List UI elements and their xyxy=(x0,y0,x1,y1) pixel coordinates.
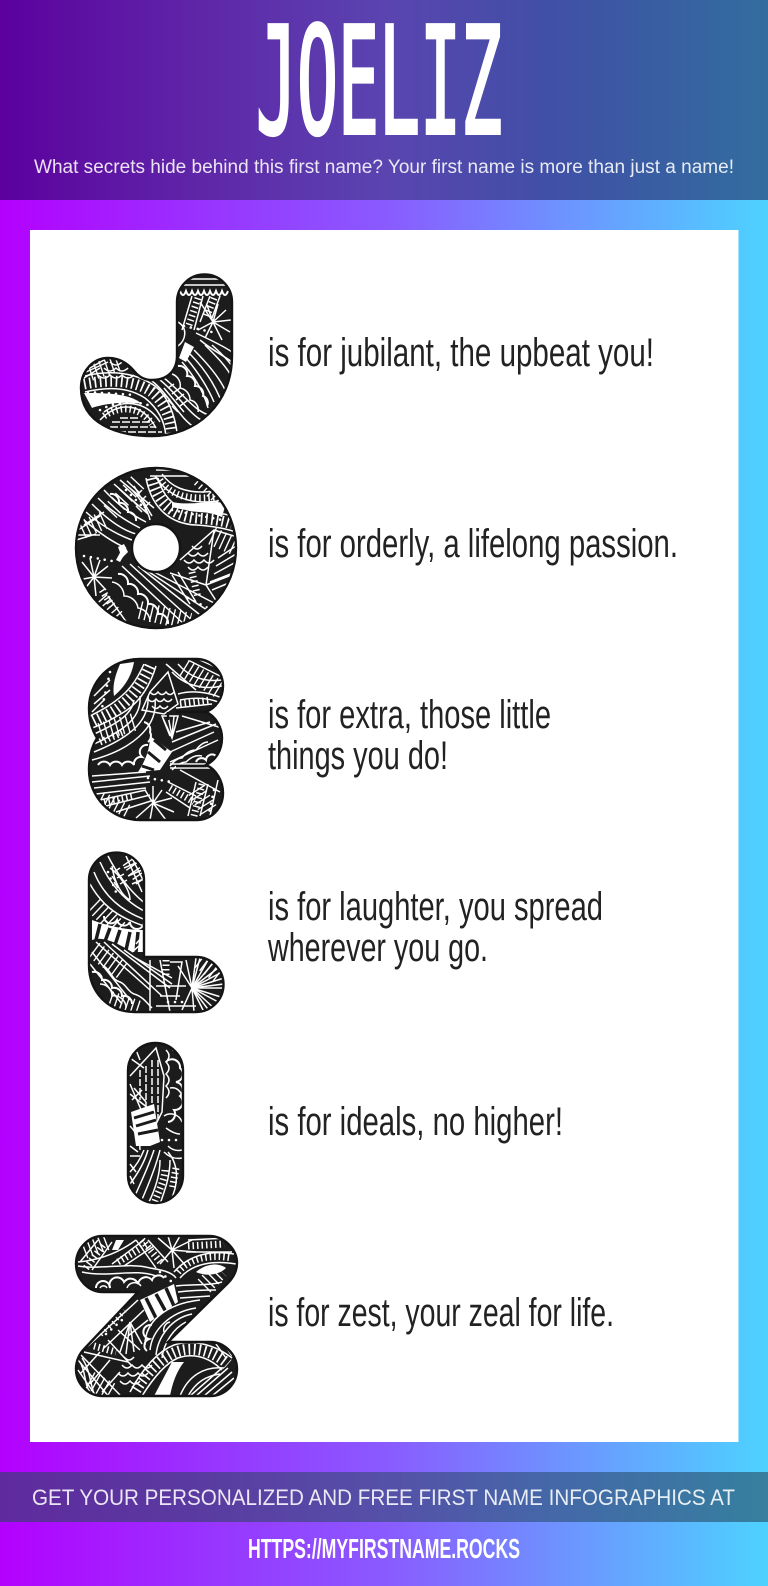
footer URL: HTTPS://MYFIRSTNAME.ROCKS xyxy=(248,1533,520,1564)
text: L lines: wherever you go. xyxy=(267,926,488,970)
header band xyxy=(0,0,768,200)
text: E lines: things you do! xyxy=(268,734,448,778)
white content panel xyxy=(30,230,738,1442)
text: L lines xyxy=(267,885,603,970)
letter Z icon xyxy=(76,1236,237,1398)
text: E lines xyxy=(268,693,551,778)
text: L lines: is for laughter, you spread xyxy=(268,885,603,929)
text: E lines: is for extra, those little xyxy=(268,693,551,737)
subtitle: What secrets hide behind this first name? Your first name is more than just a name! xyxy=(34,157,734,178)
letter L icon xyxy=(89,853,224,1012)
footer call-to-action strip xyxy=(0,1472,768,1522)
text: Z line: is for zest, your zeal for life. xyxy=(268,1291,614,1335)
letter E icon xyxy=(89,659,223,820)
letter I icon xyxy=(128,1043,183,1204)
footer text: GET YOUR PERSONALIZED AND FREE FIRST NAME INFOGRAPHICS AT xyxy=(32,1485,735,1510)
text: I line: is for ideals, no higher! xyxy=(268,1100,563,1144)
letter J icon xyxy=(81,274,233,440)
letter O icon xyxy=(76,468,236,630)
